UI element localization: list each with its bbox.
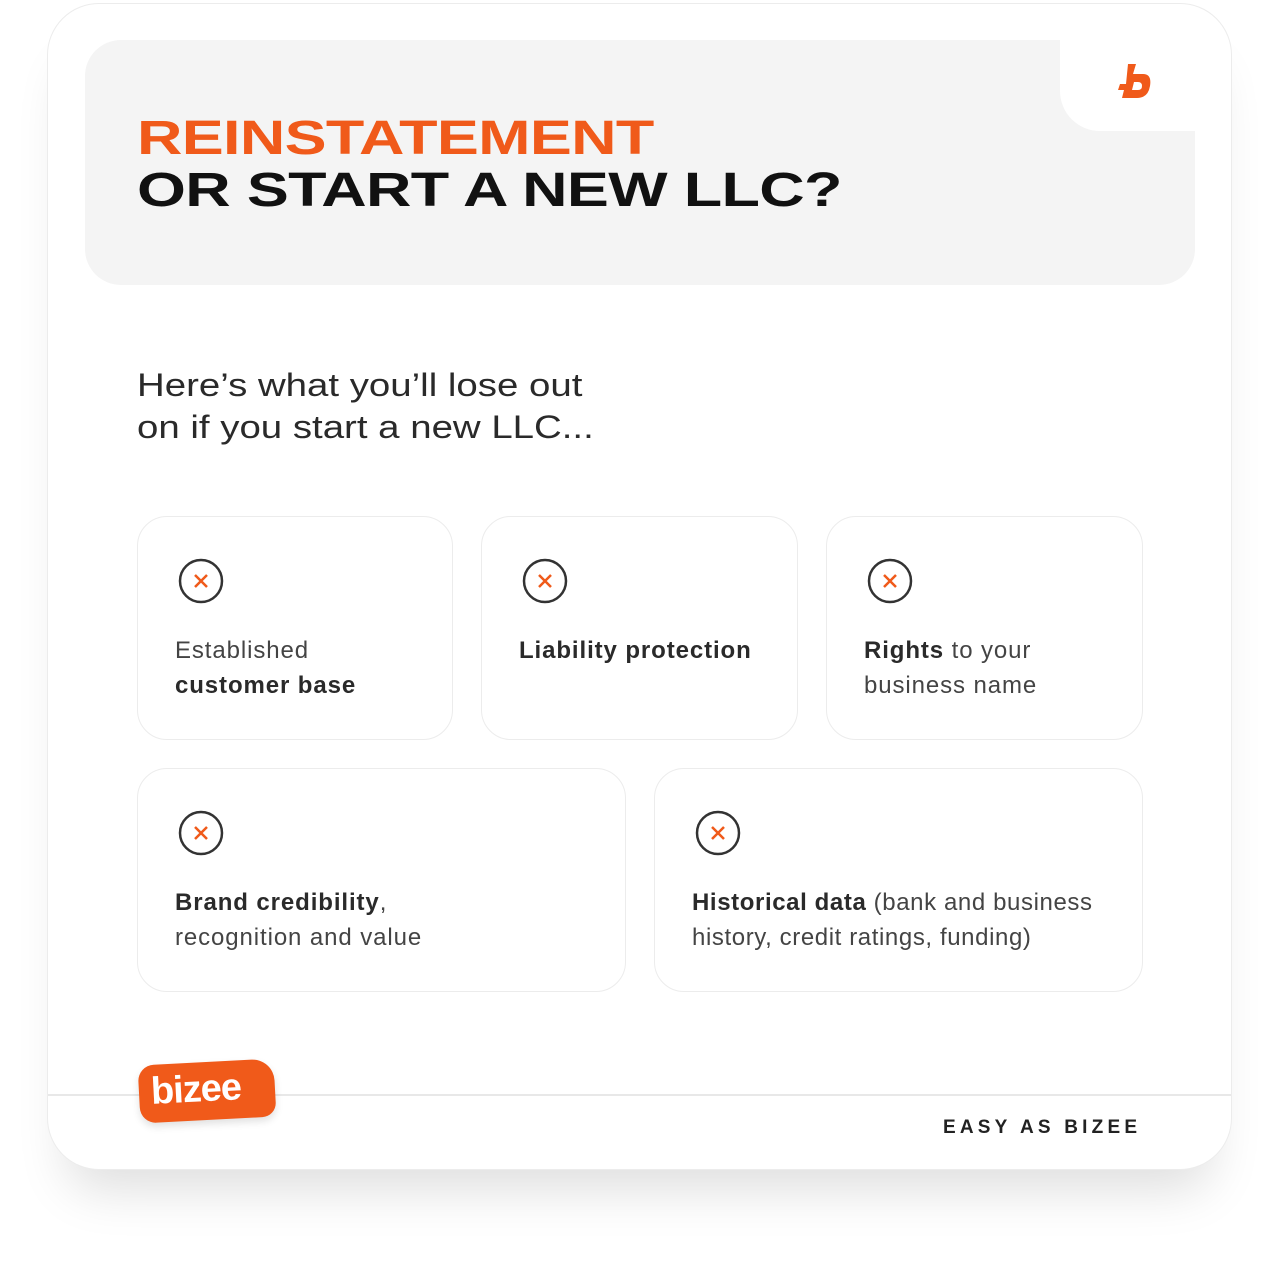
text: business name <box>864 672 1037 699</box>
card: customer base <box>137 516 453 740</box>
text: Historical data (bank and business <box>692 889 1093 916</box>
text: Established <box>175 637 309 664</box>
logo: bizee: bizee <box>150 1066 242 1113</box>
text <box>864 637 1037 699</box>
text: Brand credibility, <box>175 889 387 916</box>
title <box>137 112 842 217</box>
text: Rights to your <box>864 637 1031 664</box>
logo: bizee <box>138 1058 276 1124</box>
header panel <box>85 40 1195 285</box>
card: liability <box>481 516 798 740</box>
text: Liability protection <box>519 637 752 664</box>
icon: x circle <box>522 558 568 604</box>
icon: x circle <box>178 558 224 604</box>
subtitle <box>137 367 594 445</box>
text <box>692 889 1093 951</box>
text <box>175 637 356 699</box>
icon: x circle <box>696 810 740 856</box>
icon: x circle <box>868 558 912 604</box>
text <box>175 889 422 951</box>
card: historical <box>654 768 1143 992</box>
text: customer base <box>175 672 356 699</box>
footer tagline: EASY AS BIZEE <box>943 1117 1141 1138</box>
text: recognition and value <box>175 924 422 951</box>
card: rights <box>826 516 1143 740</box>
subtitle: Here’s what you’ll lose out <box>137 367 582 403</box>
title: REINSTATEMENT <box>137 112 654 165</box>
subtitle: on if you start a new LLC... <box>137 409 594 445</box>
title: OR START A NEW LLC? <box>137 164 842 217</box>
card: brand <box>137 768 626 992</box>
icon: x circle <box>178 810 224 856</box>
icon: corner logo <box>1118 64 1150 98</box>
text: history, credit ratings, funding) <box>692 924 1032 951</box>
